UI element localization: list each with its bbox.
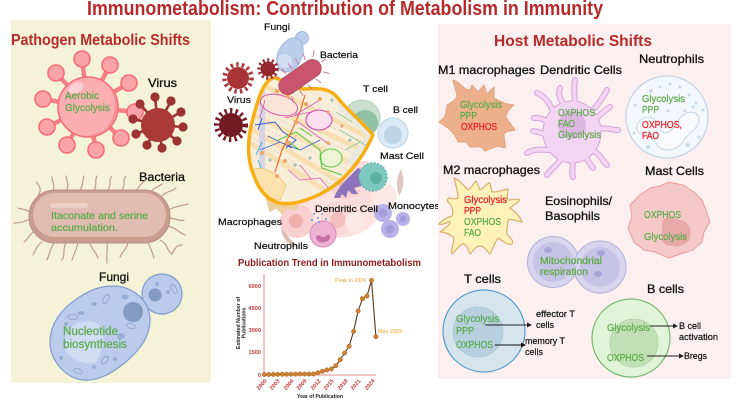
- label: mast cell: Mast Cell: [380, 151, 424, 162]
- icon: dendritic cell: [527, 80, 618, 177]
- y-axis title: Publications: [242, 307, 248, 338]
- text block: neutrophil metabolism: Glycolysis: [642, 93, 685, 105]
- chart axes: [264, 274, 376, 375]
- text block: dendritic metabolism: OXPHOS: [558, 107, 595, 119]
- label: b cells: B cells: [647, 282, 684, 296]
- label: fungi: Fungi: [264, 22, 290, 33]
- text block: neutrophil metabolism: PPP: [642, 104, 659, 116]
- x-axis ticks: [256, 378, 377, 392]
- text: b cell activation: activation: [679, 332, 718, 343]
- icon: central bacterium: [273, 44, 336, 102]
- y-axis ticks: 6000: [249, 284, 261, 290]
- text block: neutrophil metabolism: OXPHOS,: [642, 119, 682, 131]
- y-axis ticks: 1500: [249, 350, 261, 356]
- y-axis ticks: [249, 284, 261, 379]
- y-axis ticks: 0: [258, 373, 261, 379]
- icon: fungus cell: [50, 274, 182, 380]
- text block: m2 metabolism: OXPHOS: [464, 216, 501, 228]
- label: accumulation: accumulation.: [51, 222, 118, 234]
- text block: m2 metabolism: FAO: [464, 227, 481, 239]
- icon: b cell: [592, 299, 670, 377]
- chart title: Publication Trend in Immunometabolism: [238, 258, 421, 269]
- x-axis ticks: 2024: [364, 378, 377, 392]
- text block: m2 metabolism: Glycolysis: [464, 194, 507, 206]
- icon: mast cell: [628, 182, 710, 258]
- icon: large virus: [35, 51, 143, 158]
- panel: host metabolic shifts: [438, 24, 731, 379]
- icon: neutrophil: [626, 76, 708, 158]
- label: fungi: Fungi: [99, 270, 129, 284]
- icon: central fungus: [272, 32, 308, 76]
- text block: m1 metabolism: PPP: [460, 110, 477, 122]
- label: nucleotide: Nucleotide: [63, 326, 118, 338]
- label: t cell: T cell: [363, 84, 388, 95]
- text block: mitochondrial respiration: respiration: [540, 266, 588, 278]
- label: mast cells: Mast Cells: [645, 164, 704, 178]
- text block: mitochondrial respiration: [540, 255, 602, 278]
- text block: mast cell metabolism: [644, 209, 687, 243]
- icon: m2 macrophage: [439, 178, 522, 254]
- y-axis title: [236, 297, 248, 349]
- line chart: publication trend: [236, 258, 421, 400]
- text block: m1 metabolism: OXPHOS: [461, 121, 497, 133]
- heading: pathogen metabolic shifts: Pathogen Metabolic Shifts: [11, 32, 190, 49]
- heading: host metabolic shifts: Host Metabolic Shifts: [494, 33, 652, 50]
- label: biosynthesis: biosynthesis: [63, 339, 127, 351]
- panel: central immunometabolism illustration: [216, 22, 440, 252]
- text block: neutrophil metabolism: [642, 93, 685, 142]
- label: itaconate and serine: Itaconate and serine: [51, 210, 148, 222]
- text: effector t cells: cells: [536, 320, 554, 331]
- text: memory t cells: memory T: [525, 336, 565, 347]
- label: virus: Virus: [148, 76, 177, 90]
- panel: pathogen metabolic shifts: [11, 20, 211, 383]
- annotation: may 2025: May 2025: [378, 329, 402, 335]
- arrow: to memory t cells: [495, 342, 526, 348]
- x-axis ticks: 2003: [269, 378, 282, 392]
- label: neutrophils: Neutrophils: [254, 241, 308, 252]
- label: bacteria: Bacteria: [139, 170, 185, 184]
- text: effector t cells: [536, 309, 575, 331]
- text block: m1 metabolism: [460, 99, 502, 133]
- text: memory t cells: cells: [525, 347, 543, 358]
- x-axis ticks: 2006: [283, 378, 296, 392]
- label: eosinophils: Eosinophils/: [545, 194, 613, 208]
- label: aerobic glycolysis: Aerobic: [65, 90, 99, 102]
- x-axis ticks: 2012: [310, 378, 323, 392]
- icon: eosinophils and basophils: [528, 236, 626, 293]
- icon: metabolic map in shield: [249, 78, 380, 204]
- arrow: to effector t cells: [485, 322, 532, 328]
- text block: b cell metabolism: Glycolysis: [607, 322, 650, 334]
- text block: b cell metabolism: [607, 322, 650, 364]
- text block: mast cell metabolism: Glycolysis: [644, 231, 687, 243]
- text block: t cell metabolism: PPP: [456, 325, 474, 337]
- text block: dendritic metabolism: Glycolysis: [558, 129, 601, 141]
- label: dendritic cell: Dendritic Cell: [315, 204, 378, 215]
- arrow: to b cell activation: [650, 324, 678, 328]
- label: t cells: T cells: [464, 272, 501, 286]
- text block: neutrophil metabolism: FAO: [642, 130, 659, 142]
- icon: t cell: [443, 290, 525, 372]
- label: virus: Virus: [227, 95, 251, 106]
- icon: m1 macrophage: [439, 80, 515, 151]
- label: monocytes: Monocytes: [388, 201, 440, 212]
- y-axis ticks: 4500: [249, 306, 261, 312]
- text block: mast cell metabolism: OXPHOS: [644, 209, 681, 221]
- text: bregs: Bregs: [684, 351, 707, 362]
- trend line and points: [262, 278, 378, 377]
- x-axis title: Year of Publication: [297, 394, 344, 400]
- arrow: to bregs: [647, 354, 684, 358]
- x-axis ticks: 2009: [296, 378, 309, 392]
- text block: b cell metabolism: OXPHOS: [607, 352, 644, 364]
- y-axis title: Estimated Number of: [236, 297, 242, 349]
- text block: m2 metabolism: [464, 194, 507, 239]
- text block: dendritic metabolism: [558, 107, 601, 141]
- text block: mitochondrial respiration: Mitochondrial: [540, 255, 602, 267]
- x-axis ticks: 2000: [256, 378, 269, 392]
- text block: t cell metabolism: [456, 313, 499, 351]
- annotation: peak in 2024: Peak in 2024: [335, 278, 367, 284]
- text block: m2 metabolism: PPP: [464, 205, 481, 217]
- y-axis ticks: 3000: [249, 328, 261, 334]
- icon: small virus: [128, 92, 188, 153]
- text: b cell activation: [679, 321, 718, 343]
- label: basophils: Basophils: [545, 209, 600, 223]
- text: b cell activation: B cell: [679, 321, 701, 332]
- x-axis ticks: 2018: [337, 378, 350, 392]
- text block: dendritic metabolism: FAO: [558, 118, 575, 130]
- label: macrophages: Macrophages: [218, 217, 282, 228]
- label: b cell: B cell: [393, 105, 418, 116]
- text block: t cell metabolism: OXPHOS: [456, 339, 493, 351]
- label: m2 macrophages: M2 macrophages: [443, 163, 540, 177]
- icon: bacterium: [14, 176, 188, 263]
- x-axis ticks: 2015: [323, 378, 336, 392]
- label: bacteria: Bacteria: [320, 50, 359, 61]
- text: memory t cells: [525, 336, 565, 358]
- icon: central viruses: [216, 60, 277, 140]
- text block: m1 metabolism: Glycolysis: [460, 99, 502, 111]
- x-axis ticks: 2021: [350, 378, 363, 392]
- label: dendritic cells: Dendritic Cells: [540, 63, 622, 77]
- text block: t cell metabolism: Glycolysis: [456, 313, 499, 325]
- label: glycolysis in virus: Glycolysis: [65, 102, 110, 114]
- text: effector t cells: effector T: [536, 309, 575, 320]
- label: neutrophils: Neutrophils: [639, 52, 704, 66]
- label: m1 macrophages: M1 macrophages: [438, 63, 535, 77]
- icon: central immune cells: [266, 100, 410, 247]
